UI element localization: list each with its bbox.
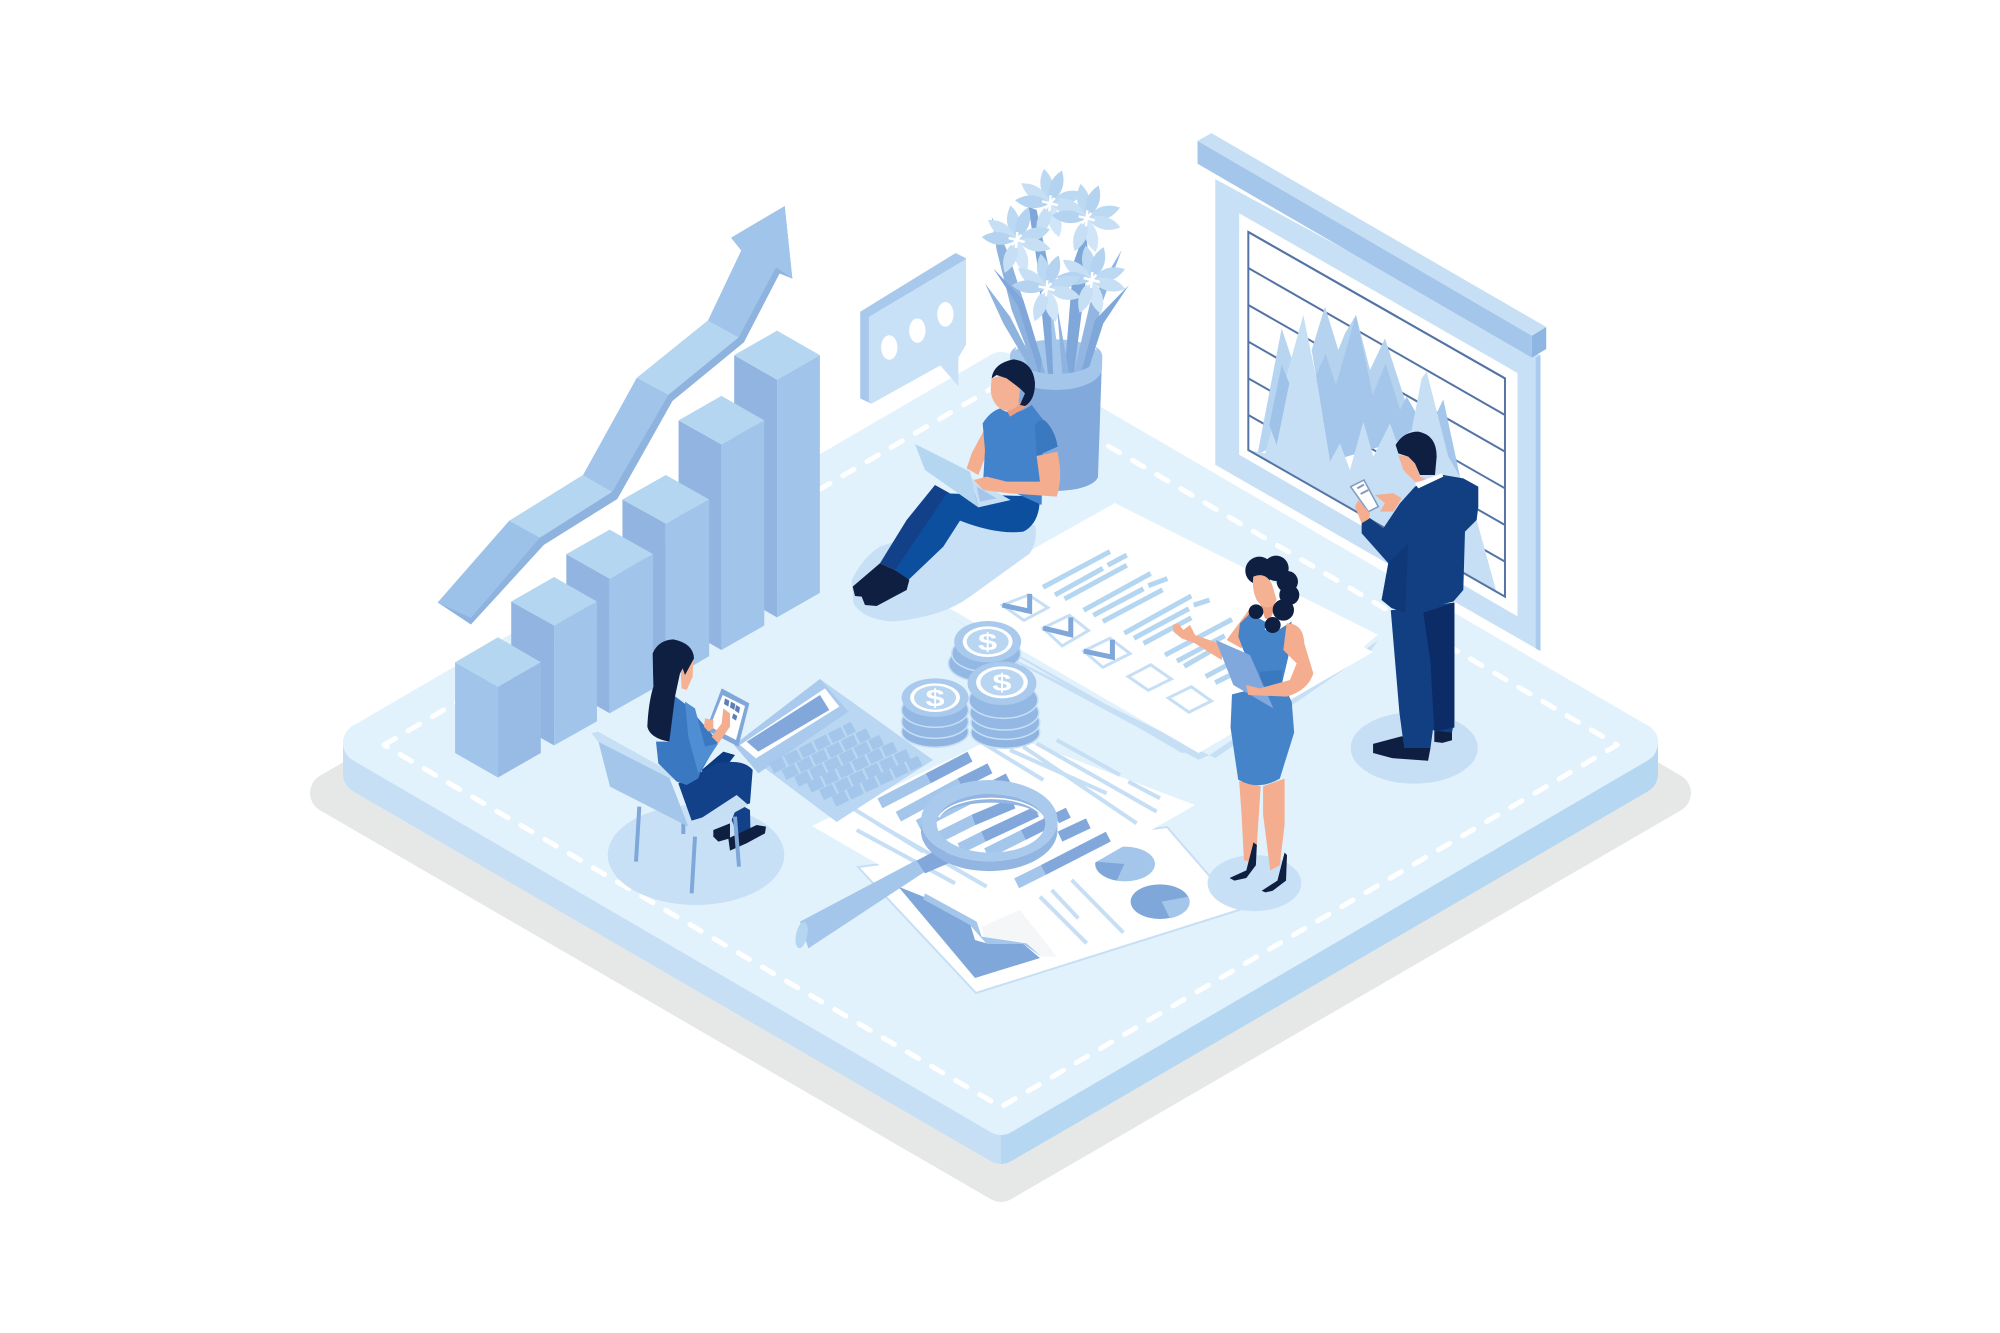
chair seat bbox=[688, 795, 748, 835]
legs bbox=[1239, 781, 1261, 863]
extended arm bbox=[1173, 623, 1223, 660]
hair bbox=[647, 639, 694, 742]
floor shadow bbox=[1208, 855, 1301, 911]
woman seated on chair with tablet bbox=[592, 639, 784, 905]
pot back bbox=[1010, 339, 1102, 381]
inner wall bbox=[937, 794, 1045, 823]
calculator keys bbox=[772, 727, 920, 802]
magnifying glass bbox=[793, 780, 1058, 949]
ground shadow bbox=[330, 404, 1671, 1182]
text lines bbox=[1043, 552, 1232, 683]
pants bbox=[702, 752, 735, 777]
ring side bbox=[921, 821, 1058, 871]
under sheet bbox=[967, 636, 1378, 760]
bar 5 bbox=[679, 396, 764, 650]
screen sheet bbox=[1239, 213, 1518, 616]
bar 4 bbox=[622, 475, 709, 682]
laptop bbox=[915, 444, 1011, 507]
paper bbox=[939, 503, 1378, 753]
presentation screen bbox=[1198, 133, 1546, 651]
chair back legs bbox=[636, 807, 683, 862]
plant in pot bbox=[981, 168, 1129, 491]
chart grid and area chart bbox=[1248, 232, 1505, 597]
neck and ear bbox=[1398, 455, 1428, 482]
bar 3 bbox=[566, 530, 653, 713]
pie 1 bbox=[1095, 847, 1155, 881]
far arm bbox=[967, 432, 987, 475]
handle bbox=[800, 860, 925, 948]
shoes bbox=[1373, 736, 1430, 761]
ring top bbox=[921, 780, 1058, 861]
collar bbox=[1415, 473, 1443, 488]
leaves bbox=[985, 198, 1129, 378]
hair bbox=[1245, 556, 1299, 633]
chair back bbox=[598, 740, 688, 827]
screen roller bbox=[1198, 133, 1546, 358]
platform side: right bbox=[1001, 724, 1658, 1164]
bar 6 bbox=[734, 331, 820, 617]
trousers bbox=[1391, 603, 1454, 748]
jacket bbox=[1362, 475, 1478, 613]
woman sitting on floor with laptop bbox=[852, 359, 1060, 622]
growth arrow bbox=[438, 206, 792, 624]
coin stacks bbox=[902, 621, 1040, 748]
near arm bbox=[974, 452, 1060, 497]
hands bbox=[1355, 500, 1370, 523]
man standing with phone bbox=[1351, 432, 1478, 784]
coin stack left: $ bbox=[925, 685, 945, 712]
face bbox=[1253, 575, 1277, 607]
platform bbox=[363, 372, 1638, 1144]
front leg bbox=[895, 493, 1040, 580]
phone bbox=[1351, 480, 1378, 512]
t-shirt bbox=[983, 405, 1043, 505]
chair front legs bbox=[692, 817, 739, 893]
back arm bbox=[1227, 608, 1250, 648]
shoes bbox=[713, 823, 730, 842]
hair bbox=[1396, 432, 1437, 475]
check boxes bbox=[1002, 595, 1211, 712]
tablet bbox=[706, 688, 749, 747]
floor shadow bbox=[852, 520, 1036, 622]
neck bbox=[1260, 603, 1277, 620]
pie 2 bbox=[1131, 884, 1189, 919]
bar report document bbox=[812, 733, 1195, 926]
skirt bbox=[1231, 682, 1294, 785]
bar 2 bbox=[511, 577, 597, 745]
clipboard bbox=[1216, 640, 1273, 708]
coin stack front: $ bbox=[992, 670, 1012, 696]
calculator bbox=[734, 679, 933, 822]
heels bbox=[1230, 842, 1257, 881]
flowers bbox=[1015, 168, 1085, 239]
back leg bbox=[880, 485, 950, 570]
hands bbox=[704, 718, 713, 732]
screen panel bbox=[1215, 179, 1540, 651]
socks bbox=[853, 563, 909, 606]
floor shadow bbox=[608, 805, 784, 905]
chat bubble bbox=[860, 253, 966, 404]
head bbox=[991, 359, 1035, 417]
face bbox=[681, 658, 693, 690]
coin stack back: $ bbox=[978, 629, 998, 656]
pie chart document bbox=[858, 827, 1239, 993]
check marks bbox=[1002, 594, 1112, 657]
checklist documents bbox=[939, 503, 1378, 760]
pot body bbox=[1010, 360, 1102, 491]
platform side: left bbox=[343, 725, 1001, 1164]
torso bbox=[656, 695, 718, 785]
woman standing with clipboard bbox=[1173, 556, 1313, 911]
bar 1 bbox=[455, 637, 541, 778]
platform top surface bbox=[363, 372, 1638, 1115]
holding arm bbox=[1246, 623, 1313, 697]
dress top bbox=[1238, 613, 1292, 687]
floor shadow bbox=[1351, 712, 1478, 784]
lower leg bbox=[732, 803, 751, 842]
bar chart and arrow bbox=[438, 206, 966, 778]
